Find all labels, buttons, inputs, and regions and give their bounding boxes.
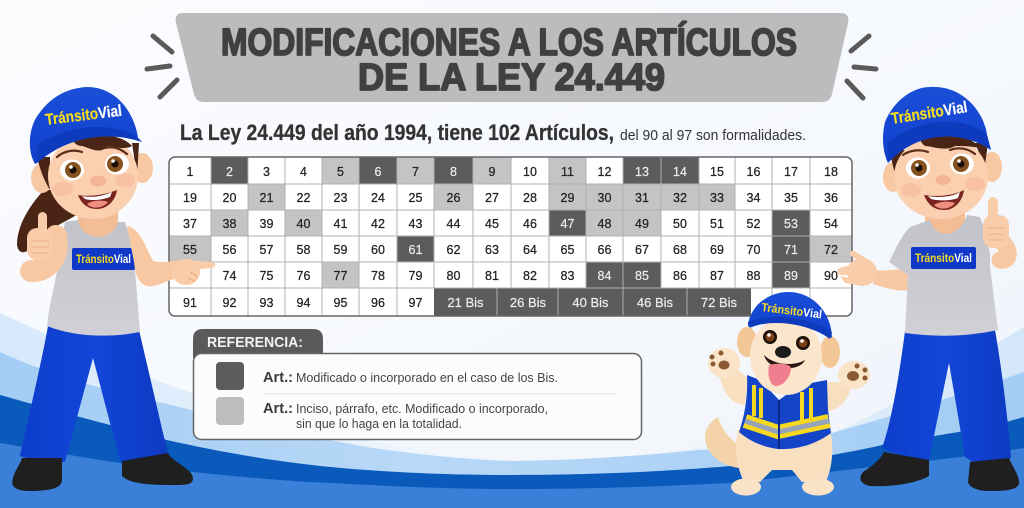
row 3 numbers: 45 [485,217,499,231]
row 2 numbers: 31 [635,191,649,205]
safety vest [739,375,831,449]
row 3 numbers: 42 [371,217,385,231]
background waves [0,313,1024,508]
shirt badge [911,247,976,269]
ponytail [17,190,80,252]
row 3 numbers: 53 [784,217,798,231]
left raised arm [708,348,748,405]
row 2 numbers [183,191,838,205]
pointing arm [837,251,908,291]
cap [883,87,991,163]
row 2 numbers: 27 [485,191,499,205]
row 2 numbers: 22 [297,191,310,205]
character: dog [705,292,870,496]
row 6 numbers and Bis articles: 40 Bis [572,295,609,310]
row 5 numbers: 79 [409,269,422,283]
row 3 numbers: 54 [824,217,838,231]
row 3 numbers: 50 [673,217,687,231]
row 4 numbers: 64 [523,243,537,257]
row 4 numbers: 69 [710,243,724,257]
legend text: partial: sin que lo haga en la totalidad. [296,417,462,431]
row 1 numbers: 11 [561,165,574,179]
row 5 numbers: 86 [673,269,687,283]
legend text: modified: Modificado o incorporado en el caso de los Bis. [296,371,558,385]
eyes [57,147,129,180]
row 4 numbers: 59 [334,243,347,257]
subtitle: del 90 al 97 son formalidades. [620,127,806,144]
row 5 numbers: 90 [824,269,838,283]
thumbs-up arm [27,212,57,271]
row 4 numbers: 71 [784,243,798,257]
row 1 numbers: 14 [673,165,687,179]
row 5 numbers: 75 [260,269,273,283]
row 4 numbers: 58 [297,243,310,257]
row 1 numbers: 12 [598,165,611,179]
reference tab [193,329,323,358]
row 5 numbers: 89 [784,269,798,283]
dog nose [775,346,791,358]
row 3 numbers: 41 [334,217,347,231]
row 4 numbers: 61 [409,243,422,257]
cheeks [52,173,135,196]
row 2 numbers: 33 [710,191,724,205]
cell shading [169,157,852,316]
row 2 numbers: 20 [223,191,236,205]
row 2 numbers: 26 [447,191,460,205]
row 6 numbers and Bis articles: 21 Bis [447,295,484,310]
row 5 numbers: 87 [710,269,724,283]
nose [90,176,106,186]
row 6 numbers and Bis articles: 92 [223,296,236,310]
title text: MODIFICACIONES A LOS ARTÍCULOS [221,20,797,64]
row 6 numbers and Bis articles: 94 [297,296,310,310]
row 1 numbers: 1 [187,165,194,179]
row 5 numbers: 85 [635,269,649,283]
nose [936,175,950,185]
tank top [47,220,140,336]
decorative rays right [847,36,876,98]
row 3 numbers [183,217,838,231]
right raised arm [824,361,870,412]
character: boy [837,87,1019,491]
pants [20,326,168,462]
face [894,135,988,219]
dog mouth and tongue [764,355,805,386]
row 2 numbers: 23 [334,191,347,205]
hair fringe [72,135,132,150]
ears [31,153,153,193]
row 4 numbers: 66 [598,243,611,257]
row 1 numbers [187,165,838,179]
row 1 numbers: 13 [635,165,649,179]
reference box [194,354,642,440]
character: girl [12,87,215,491]
row 1 numbers: 18 [824,165,838,179]
legend text: modified: Art.: [263,369,293,386]
row 2 numbers: 35 [784,191,798,205]
row 2 numbers: 21 [260,191,273,205]
row 3 numbers: 43 [409,217,422,231]
row 3 numbers: 51 [710,217,724,231]
row 3 numbers: 52 [747,217,760,231]
articles table [169,157,852,316]
paws [731,478,834,496]
row 6 numbers and Bis articles: 96 [371,296,385,310]
cap: TránsitoVial [44,103,123,129]
row 3 numbers: 44 [447,217,460,231]
mouth [78,190,117,209]
ears [883,152,1002,192]
row 6 numbers and Bis articles: 97 [409,296,422,310]
row 1 numbers: 7 [412,165,419,179]
dark swatch [216,362,244,390]
neck [78,205,118,240]
decorative rays left [147,36,177,97]
row 1 numbers: 5 [337,165,344,179]
row 2 numbers: 34 [747,191,760,205]
row 2 numbers: 30 [598,191,611,205]
head [750,317,822,395]
row 1 numbers: 4 [300,165,307,179]
hair fringe [918,131,980,149]
mouth [924,190,964,210]
t-shirt [889,215,998,336]
row 5 numbers: 81 [485,269,499,283]
shoes [12,453,193,491]
row 3 numbers: 38 [223,217,236,231]
title text: DE LA LEY 24.449 [358,57,665,99]
row 1 numbers: 10 [523,165,537,179]
ears [737,327,840,368]
row 4 numbers: 67 [635,243,649,257]
row 1 numbers: 6 [375,165,382,179]
neck [925,205,965,235]
pointing arm [127,226,215,286]
cap: TránsitoVial [890,99,969,128]
row 3 numbers: 49 [635,217,649,231]
body [736,430,832,482]
row 4 numbers: 65 [561,243,574,257]
pants [882,330,1011,463]
row 4 numbers: 70 [747,243,760,257]
row 1 numbers: 15 [710,165,724,179]
tail [705,417,742,468]
face [48,133,138,219]
row 2 numbers: 24 [371,191,385,205]
row 2 numbers: 19 [183,191,197,205]
cap [30,87,142,164]
row 4 numbers: 63 [485,243,499,257]
legend text: partial [263,400,548,431]
title banner [176,13,848,102]
row 6 numbers and Bis articles: 93 [260,296,273,310]
side hair [37,143,139,190]
side hair [890,143,988,185]
row 1 numbers: 16 [747,165,760,179]
dog cap [748,292,832,339]
row 3 numbers: 40 [297,217,310,231]
row 2 numbers: 36 [824,191,838,205]
row 3 numbers: 39 [260,217,273,231]
row 6 numbers and Bis articles: 26 Bis [510,295,547,310]
row 2 numbers: 29 [561,191,574,205]
row 5 numbers: 82 [523,269,537,283]
row 4 numbers: 62 [447,243,460,257]
row 4 numbers: 72 [824,243,838,257]
title text [221,20,797,99]
dog eyes [763,330,810,350]
thumbs-up arm [983,197,1009,260]
subtitle: La Ley 24.449 del año 1994, tiene 102 Artículos, [180,120,614,145]
row 5 numbers: 78 [371,269,385,283]
legend text: partial: Art.: [263,400,293,417]
row 3 numbers: 46 [523,217,537,231]
row 5 numbers: 88 [747,269,760,283]
cheeks [901,177,985,197]
row 4 numbers: 57 [260,243,273,257]
row 4 numbers: 68 [673,243,687,257]
row 4 numbers [183,243,838,257]
row 5 numbers: 84 [598,269,611,283]
row 3 numbers: 47 [561,217,574,231]
row 6 numbers and Bis articles: 46 Bis [637,295,674,310]
shirt badge: TránsitoVial [915,251,972,265]
row 6 numbers and Bis articles [183,295,738,310]
row 1 numbers: 2 [226,165,233,179]
row 4 numbers: 56 [223,243,236,257]
row 6 numbers and Bis articles: 95 [334,296,347,310]
row 1 numbers: 9 [489,165,496,179]
dog cap: TránsitoVial [761,300,823,321]
row 5 numbers: 77 [334,269,347,283]
shirt badge: TránsitoVial [76,252,131,266]
row 3 numbers: 37 [183,217,197,231]
legend text: partial: Inciso, párrafo, etc. Modificado o incorporado, [296,402,548,416]
row 1 numbers: 17 [784,165,798,179]
row 2 numbers: 28 [523,191,537,205]
shoes [860,452,1019,491]
row 5 numbers: 74 [223,269,236,283]
eyes [903,148,975,178]
row 4 numbers: 60 [371,243,385,257]
reference panel [193,329,642,440]
row 2 numbers: 32 [673,191,687,205]
row 6 numbers and Bis articles: 91 [183,296,197,310]
row 1 numbers: 8 [450,165,457,179]
row 5 numbers: 80 [447,269,460,283]
row 4 numbers: 55 [183,243,197,257]
row 3 numbers: 48 [598,217,611,231]
row 6 numbers and Bis articles: 72 Bis [701,295,738,310]
row 5 numbers: 83 [561,269,574,283]
reference tab: REFERENCIA: [207,334,303,351]
shirt badge [72,248,135,270]
light swatch [216,397,244,425]
row 2 numbers: 25 [409,191,422,205]
row 5 numbers: 76 [297,269,310,283]
row 5 numbers [223,269,838,283]
row 1 numbers: 3 [263,165,270,179]
